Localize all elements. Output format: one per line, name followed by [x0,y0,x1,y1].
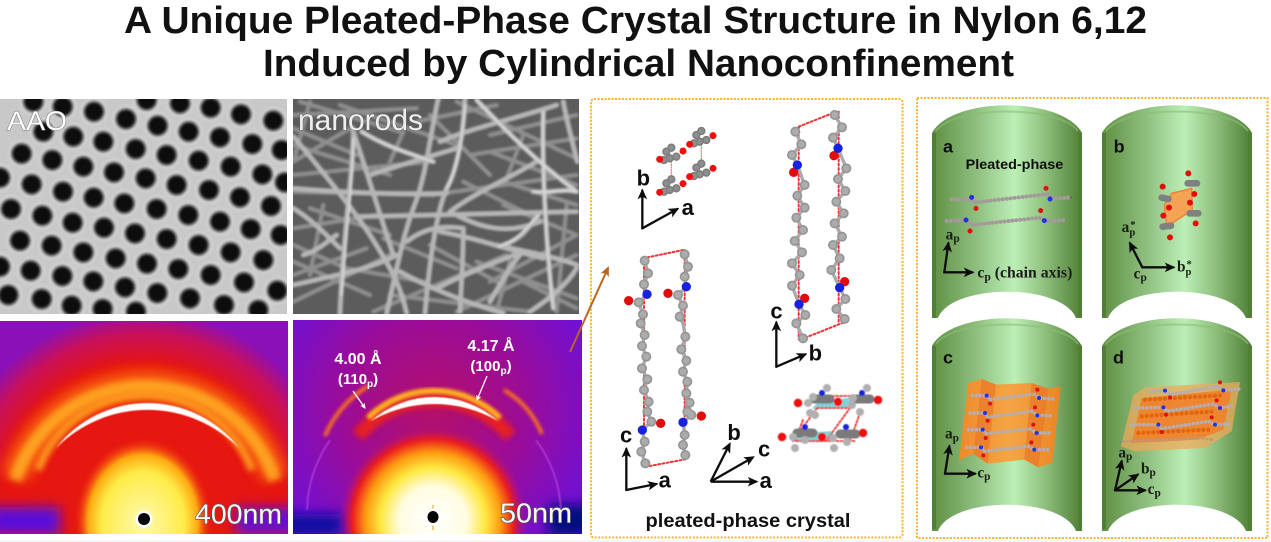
annotation: 4.17 A [467,336,515,400]
panel: pleated-phase crystal: b [637,166,650,191]
label: 50nm: 50nm [500,498,572,528]
crystal view: ab cell [782,388,878,448]
cylinder d: a [1118,444,1126,461]
annotation: 4.00 A: (110 [338,371,367,388]
label: AAO: AAO [7,106,67,136]
cylinder b: * [1186,260,1192,271]
cylinder c [932,318,1082,531]
cylinder b: p [1129,227,1135,238]
axis: c_p [1115,487,1145,494]
inner red arc [358,400,510,436]
cylinder a: a [943,136,954,156]
label: nanorods: nanorods [298,104,423,137]
panel: confined crystal schematics [917,98,1268,538]
outer orange arcs [325,386,542,436]
arrow: from XRD to crystal [570,268,608,352]
beam stop [136,510,152,528]
beam stop [414,505,452,530]
cylinder b: p [1186,267,1192,278]
annotation: 4.00 A: ) [373,371,378,388]
cylinder a: a [946,226,953,243]
pleated sheet [959,379,1061,467]
panel: pleated-phase crystal: b [809,341,822,366]
central glow [340,431,526,534]
cylinder d: p [1126,451,1132,463]
cylinder d: d [1113,348,1124,368]
annotation: 4.17 A: ) [507,358,512,375]
cylinder b: * [1130,220,1136,231]
axis: a [711,478,756,485]
pore halos [0,100,285,312]
axis: c (left view) [623,449,630,490]
axis: b*_p [1142,264,1173,271]
unit cell [1164,188,1192,227]
axis: c_p [945,470,975,477]
faint outer arcs [307,440,561,510]
axis: a_p [1115,461,1122,490]
orange arc halo [368,391,500,418]
cylinder a: c [977,265,984,282]
title: Induced by Cylindrical Nanoconfinement [263,43,1014,85]
panel: pleated-phase crystal: c [770,298,783,323]
cylinder b: a [1122,219,1129,236]
axis: c_p [944,269,972,276]
annotation: 4.17 A: 4.17 Å [467,336,515,355]
inner arc glow [38,395,252,470]
panel: AAO micrograph [0,99,287,314]
pores [0,100,285,312]
axis: b (right view) [776,354,805,367]
label: 400nm: 400nm [195,498,282,530]
cylinder c: c [977,464,984,481]
cylinder a: Pleated-phase [966,156,1064,172]
bright crescent [56,403,239,448]
cylinder d: p [1154,488,1161,500]
cylinder c: p [953,432,959,444]
panel: pleated-phase crystal: b [727,420,741,445]
axis: a (left view) [626,484,656,490]
caption: pleated-phase crystal: pleated-phase crystal [646,511,850,532]
outer yellow arc [15,386,275,480]
panel: pleated-phase crystal: a [682,195,695,220]
axis: a_p [945,446,949,474]
panel: pleated-phase crystal: c [620,423,632,448]
axis: a*_p [1130,243,1142,267]
annotation: 4.00 A [334,349,382,408]
crystal view: ab projection [642,131,713,228]
foreground fibres [293,98,577,313]
cylinder d: b [1141,460,1150,477]
panel: pleated-phase crystal: a [659,468,672,493]
crystal view: chains [626,112,846,490]
annotation: 4.17 A: p [500,366,507,377]
cylinder d: p [1150,467,1156,479]
cylinder c: p [984,471,990,483]
cylinder c: c [943,348,953,368]
cylinder a: p [953,233,960,245]
cylinder a: p [984,271,991,283]
cylinder b: b [1114,136,1125,156]
cylinder a [932,105,1082,318]
stacked sheets [1121,382,1240,451]
cylinder d [1102,318,1252,531]
axes: a, b, c triad [711,444,756,482]
panel: 400nm diffraction pattern [0,321,298,535]
panel: 50nm diffraction pattern [280,320,593,536]
panel: pleated-phase crystal: a [760,468,773,493]
annotation: 4.17 A: (100 [470,358,500,375]
panel: pleated-phase crystal [591,99,902,538]
cylinder b: b [1177,259,1186,276]
purple band at lower edge [0,507,60,535]
axis: a [642,209,677,228]
cylinder c: a [945,426,953,443]
cylinder a: (chain axis) [991,265,1072,282]
background fibres [293,102,577,312]
bright fibre highlights [342,100,577,308]
cylinder b [1102,105,1252,318]
axis: b_p [1115,475,1138,490]
molecular chains [944,188,1072,272]
cylinder b: c [1134,265,1140,282]
central glow [77,442,209,534]
outer diffuse arc [15,384,275,478]
axis: c (right view) [773,323,780,367]
cylinder b: p [1140,272,1147,284]
axis: b [711,444,730,482]
axis: b [639,191,646,228]
panel: pleated-phase crystal: c [758,437,770,462]
bright crescent [371,397,498,421]
title [124,0,1147,85]
annotation: 4.00 A: 4.00 Å [334,349,382,368]
annotation: 4.00 A: p [367,379,373,390]
cylinder d: c [1148,481,1154,498]
axis: a_p [944,243,948,272]
dark blue corners [280,514,342,536]
panel: nanorods micrograph [293,98,579,314]
title: A Unique Pleated-Phase Crystal Structure in Nylon 6,12 [124,0,1147,42]
axis: c [711,457,753,482]
